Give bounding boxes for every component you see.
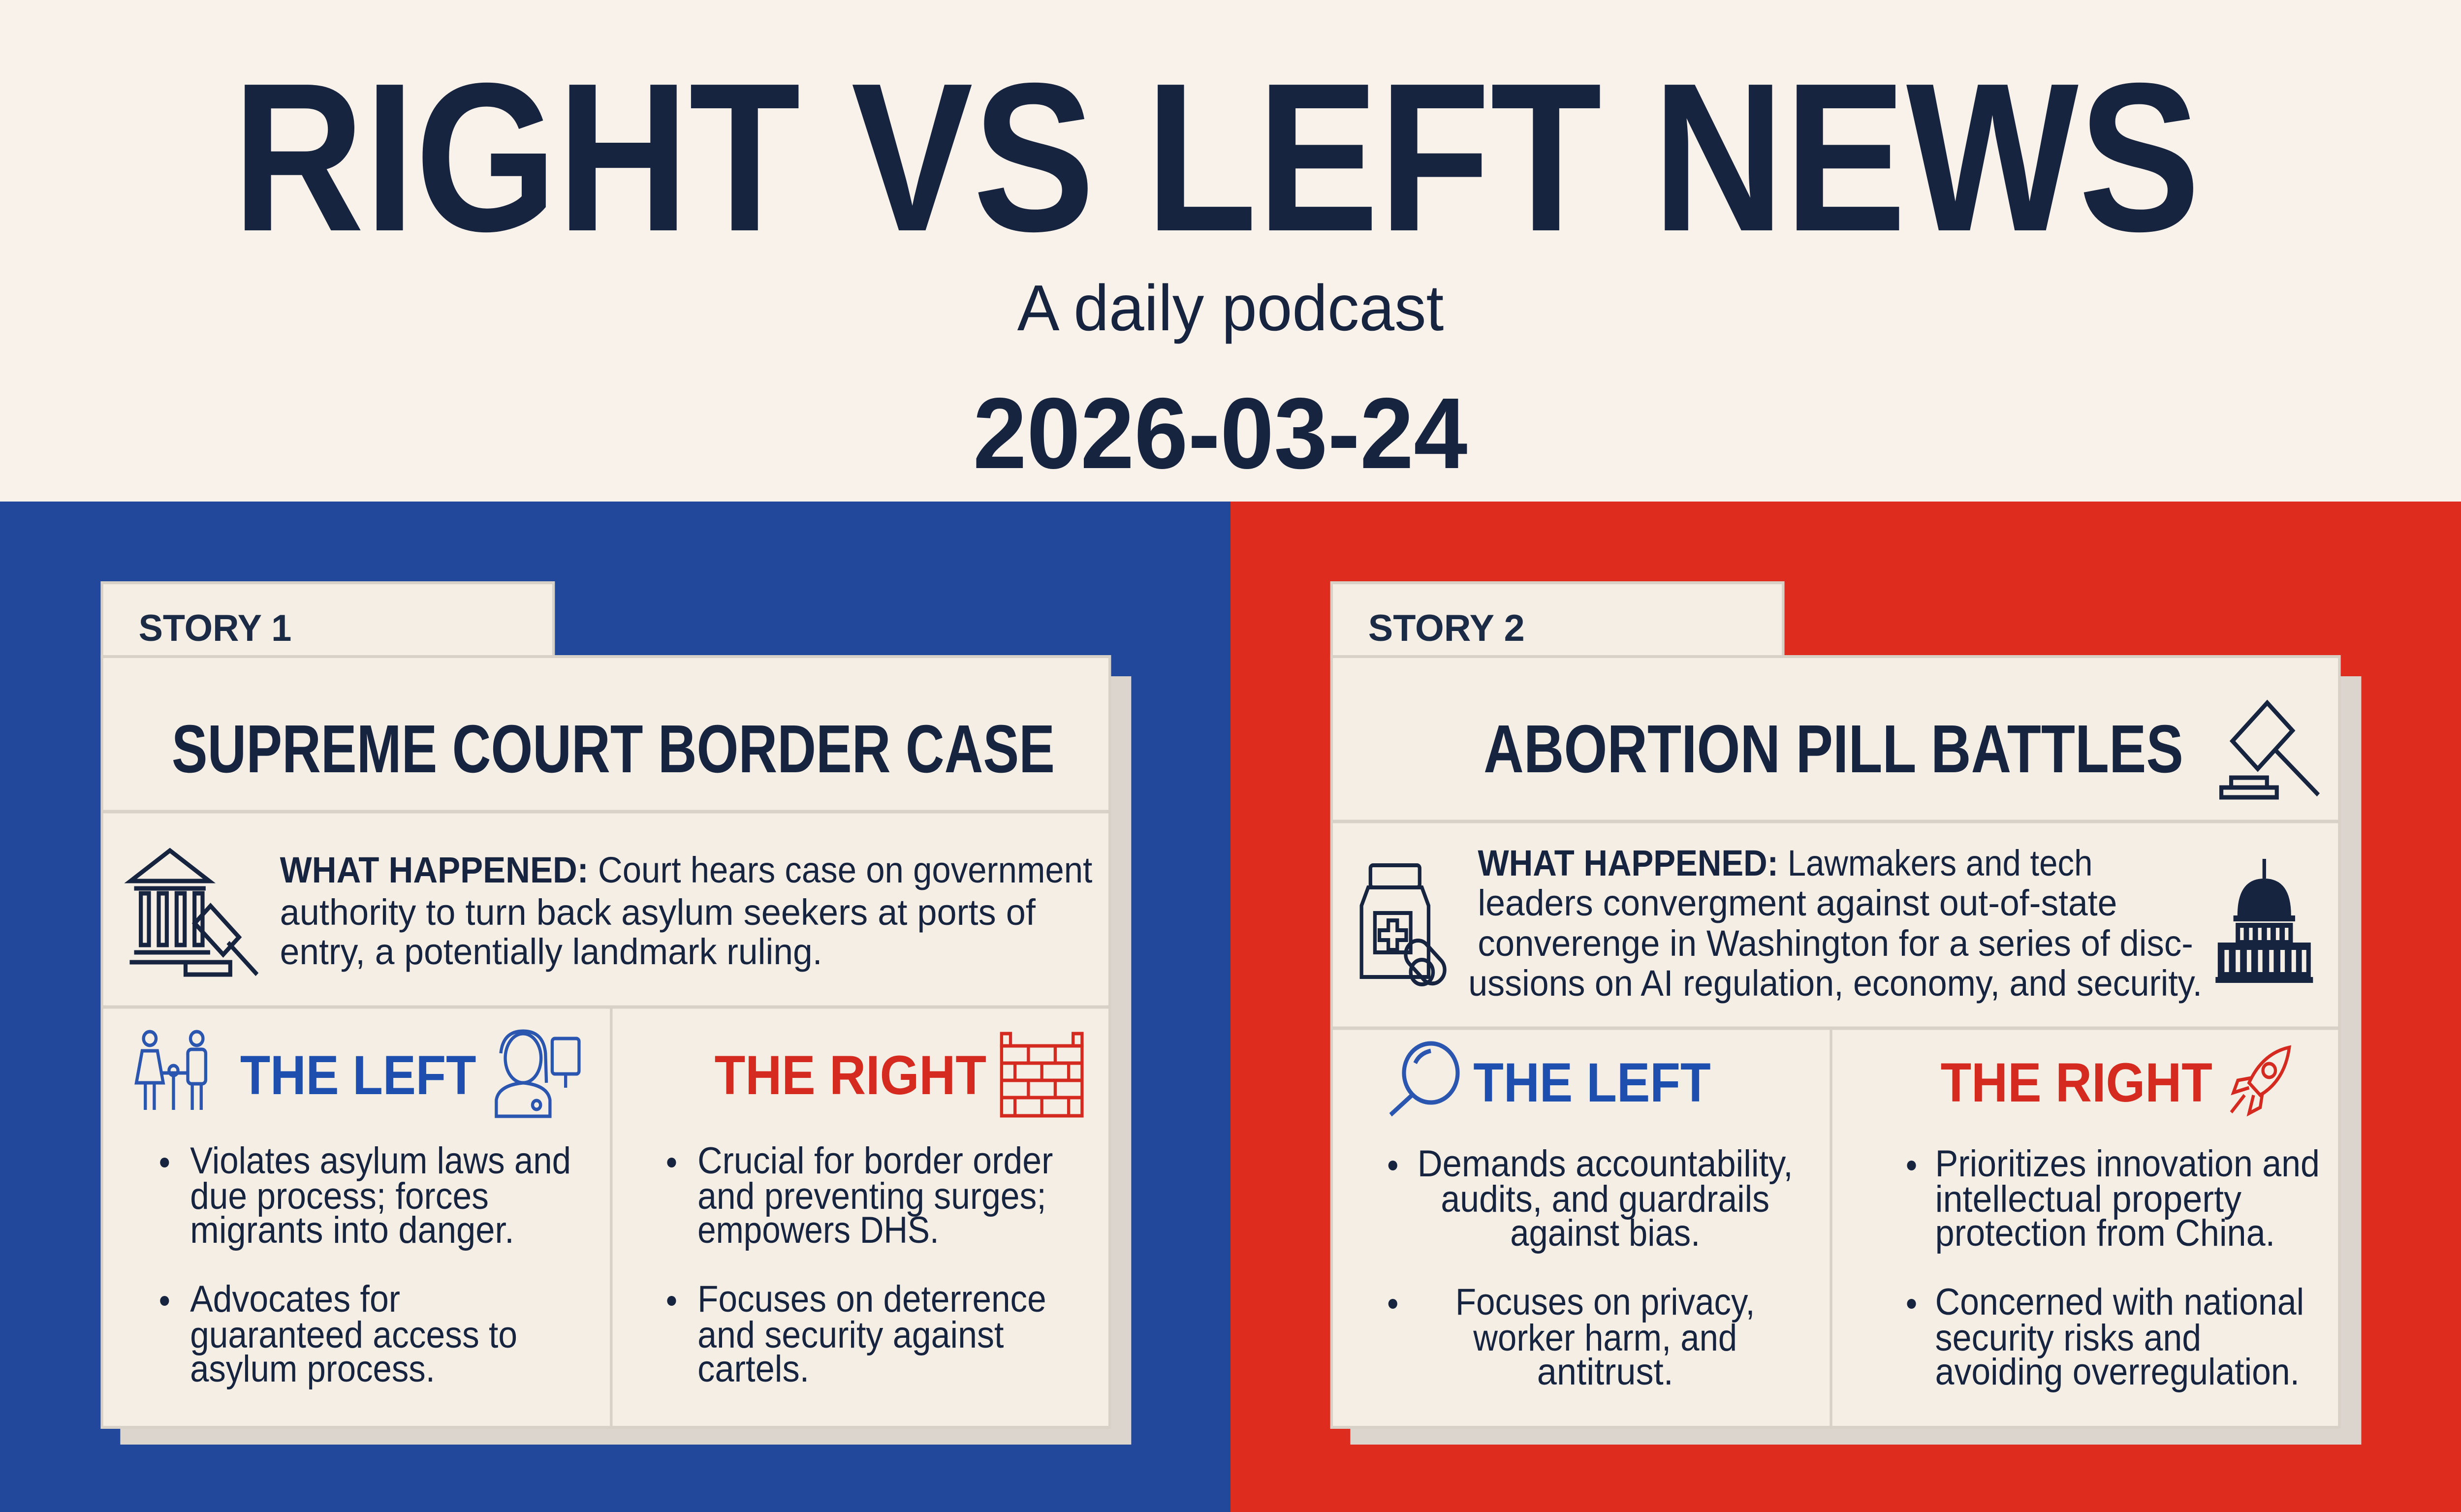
left bullets: Focuses on privacy, <box>1455 1281 1755 1323</box>
left bullets: due process; forces <box>190 1175 489 1217</box>
story 1 tab <box>102 583 554 658</box>
left bullets: Violates asylum laws and <box>190 1140 571 1182</box>
right bullets: avoiding overregulation. <box>1935 1351 2300 1393</box>
panel background: blue <box>0 502 1230 1512</box>
icon: family <box>136 1032 206 1110</box>
right bullets: Crucial for border order <box>697 1140 1053 1182</box>
left bullets <box>160 1140 571 1390</box>
left bullets: worker harm, and <box>1473 1317 1737 1359</box>
icon: doctor <box>496 1031 579 1116</box>
right bullets <box>667 1140 1053 1390</box>
left bullets <box>1388 1143 1793 1393</box>
right bullets: Prioritizes innovation and <box>1935 1143 2320 1185</box>
left bullets: audits, and guardrails <box>1441 1178 1769 1220</box>
right heading with icon <box>715 1034 1082 1116</box>
what happened text <box>280 850 1093 972</box>
right bullets: empowers DHS. <box>697 1209 939 1251</box>
what happened text: WHAT HAPPENED: Court hears case on government <box>280 850 1093 890</box>
right bullets: Concerned with national <box>1935 1281 2304 1323</box>
what happened text: entry, a potentially landmark ruling. <box>280 931 822 972</box>
right bullets: cartels. <box>697 1348 809 1390</box>
left bullets: Advocates for <box>190 1278 400 1320</box>
what happened text: converenge in Washington for a series of disc- <box>1478 923 2193 964</box>
what happened text: leaders convergment against out-of-state <box>1478 882 2117 923</box>
what happened text <box>1468 843 2202 1004</box>
right bullets: intellectual property <box>1935 1178 2242 1220</box>
icon: capitol <box>2215 859 2313 983</box>
left heading with icon <box>1390 1043 1711 1115</box>
left heading with icon: THE LEFT <box>1473 1051 1711 1113</box>
what happened text: WHAT HAPPENED: Lawmakers and tech <box>1478 843 2092 883</box>
icon: magnifier <box>1390 1043 1457 1115</box>
what happened text: ussions on AI regulation, economy, and security. <box>1468 963 2202 1004</box>
panel: story 2 <box>1331 583 2361 1445</box>
left bullets: migrants into danger. <box>190 1209 514 1251</box>
right bullets: and security against <box>697 1314 1004 1356</box>
icon: pill bottle <box>1361 865 1450 989</box>
subtitle: A daily podcast <box>1017 272 1444 344</box>
story 1 tab: STORY 1 <box>139 607 291 649</box>
right bullets: and preventing surges; <box>697 1175 1046 1217</box>
right heading with icon: THE RIGHT <box>715 1044 986 1106</box>
title: RIGHT VS LEFT NEWS <box>232 39 2200 276</box>
left bullets: guaranteed access to <box>190 1314 517 1356</box>
left bullets: asylum process. <box>190 1348 435 1390</box>
icon: courthouse with gavel <box>129 850 257 975</box>
left bullets: against bias. <box>1510 1212 1700 1254</box>
icon: rocket <box>2231 1047 2289 1113</box>
left bullets: Demands accountability, <box>1418 1143 1793 1185</box>
story 2 heading: ABORTION PILL BATTLES <box>1483 711 2183 787</box>
story 1 heading: SUPREME COURT BORDER CASE <box>172 711 1055 787</box>
panel background: red <box>1230 502 2461 1512</box>
story 2 tab <box>1331 583 1783 658</box>
panel: story 1 <box>102 583 1131 1445</box>
icon: gavel <box>2221 703 2318 797</box>
right heading with icon: THE RIGHT <box>1941 1051 2212 1113</box>
right bullets: Focuses on deterrence <box>697 1278 1046 1320</box>
left heading with icons <box>136 1031 579 1116</box>
story 2 tab: STORY 2 <box>1368 607 1525 649</box>
date: 2026-03-24 <box>973 378 1467 490</box>
right bullets <box>1907 1143 2320 1393</box>
right bullets: security risks and <box>1935 1317 2201 1359</box>
right bullets: protection from China. <box>1935 1212 2275 1254</box>
what happened text: authority to turn back asylum seekers at ports of <box>280 892 1036 933</box>
left bullets: antitrust. <box>1537 1351 1673 1393</box>
icon: border wall <box>1002 1034 1082 1116</box>
left heading with icons: THE LEFT <box>240 1044 476 1106</box>
